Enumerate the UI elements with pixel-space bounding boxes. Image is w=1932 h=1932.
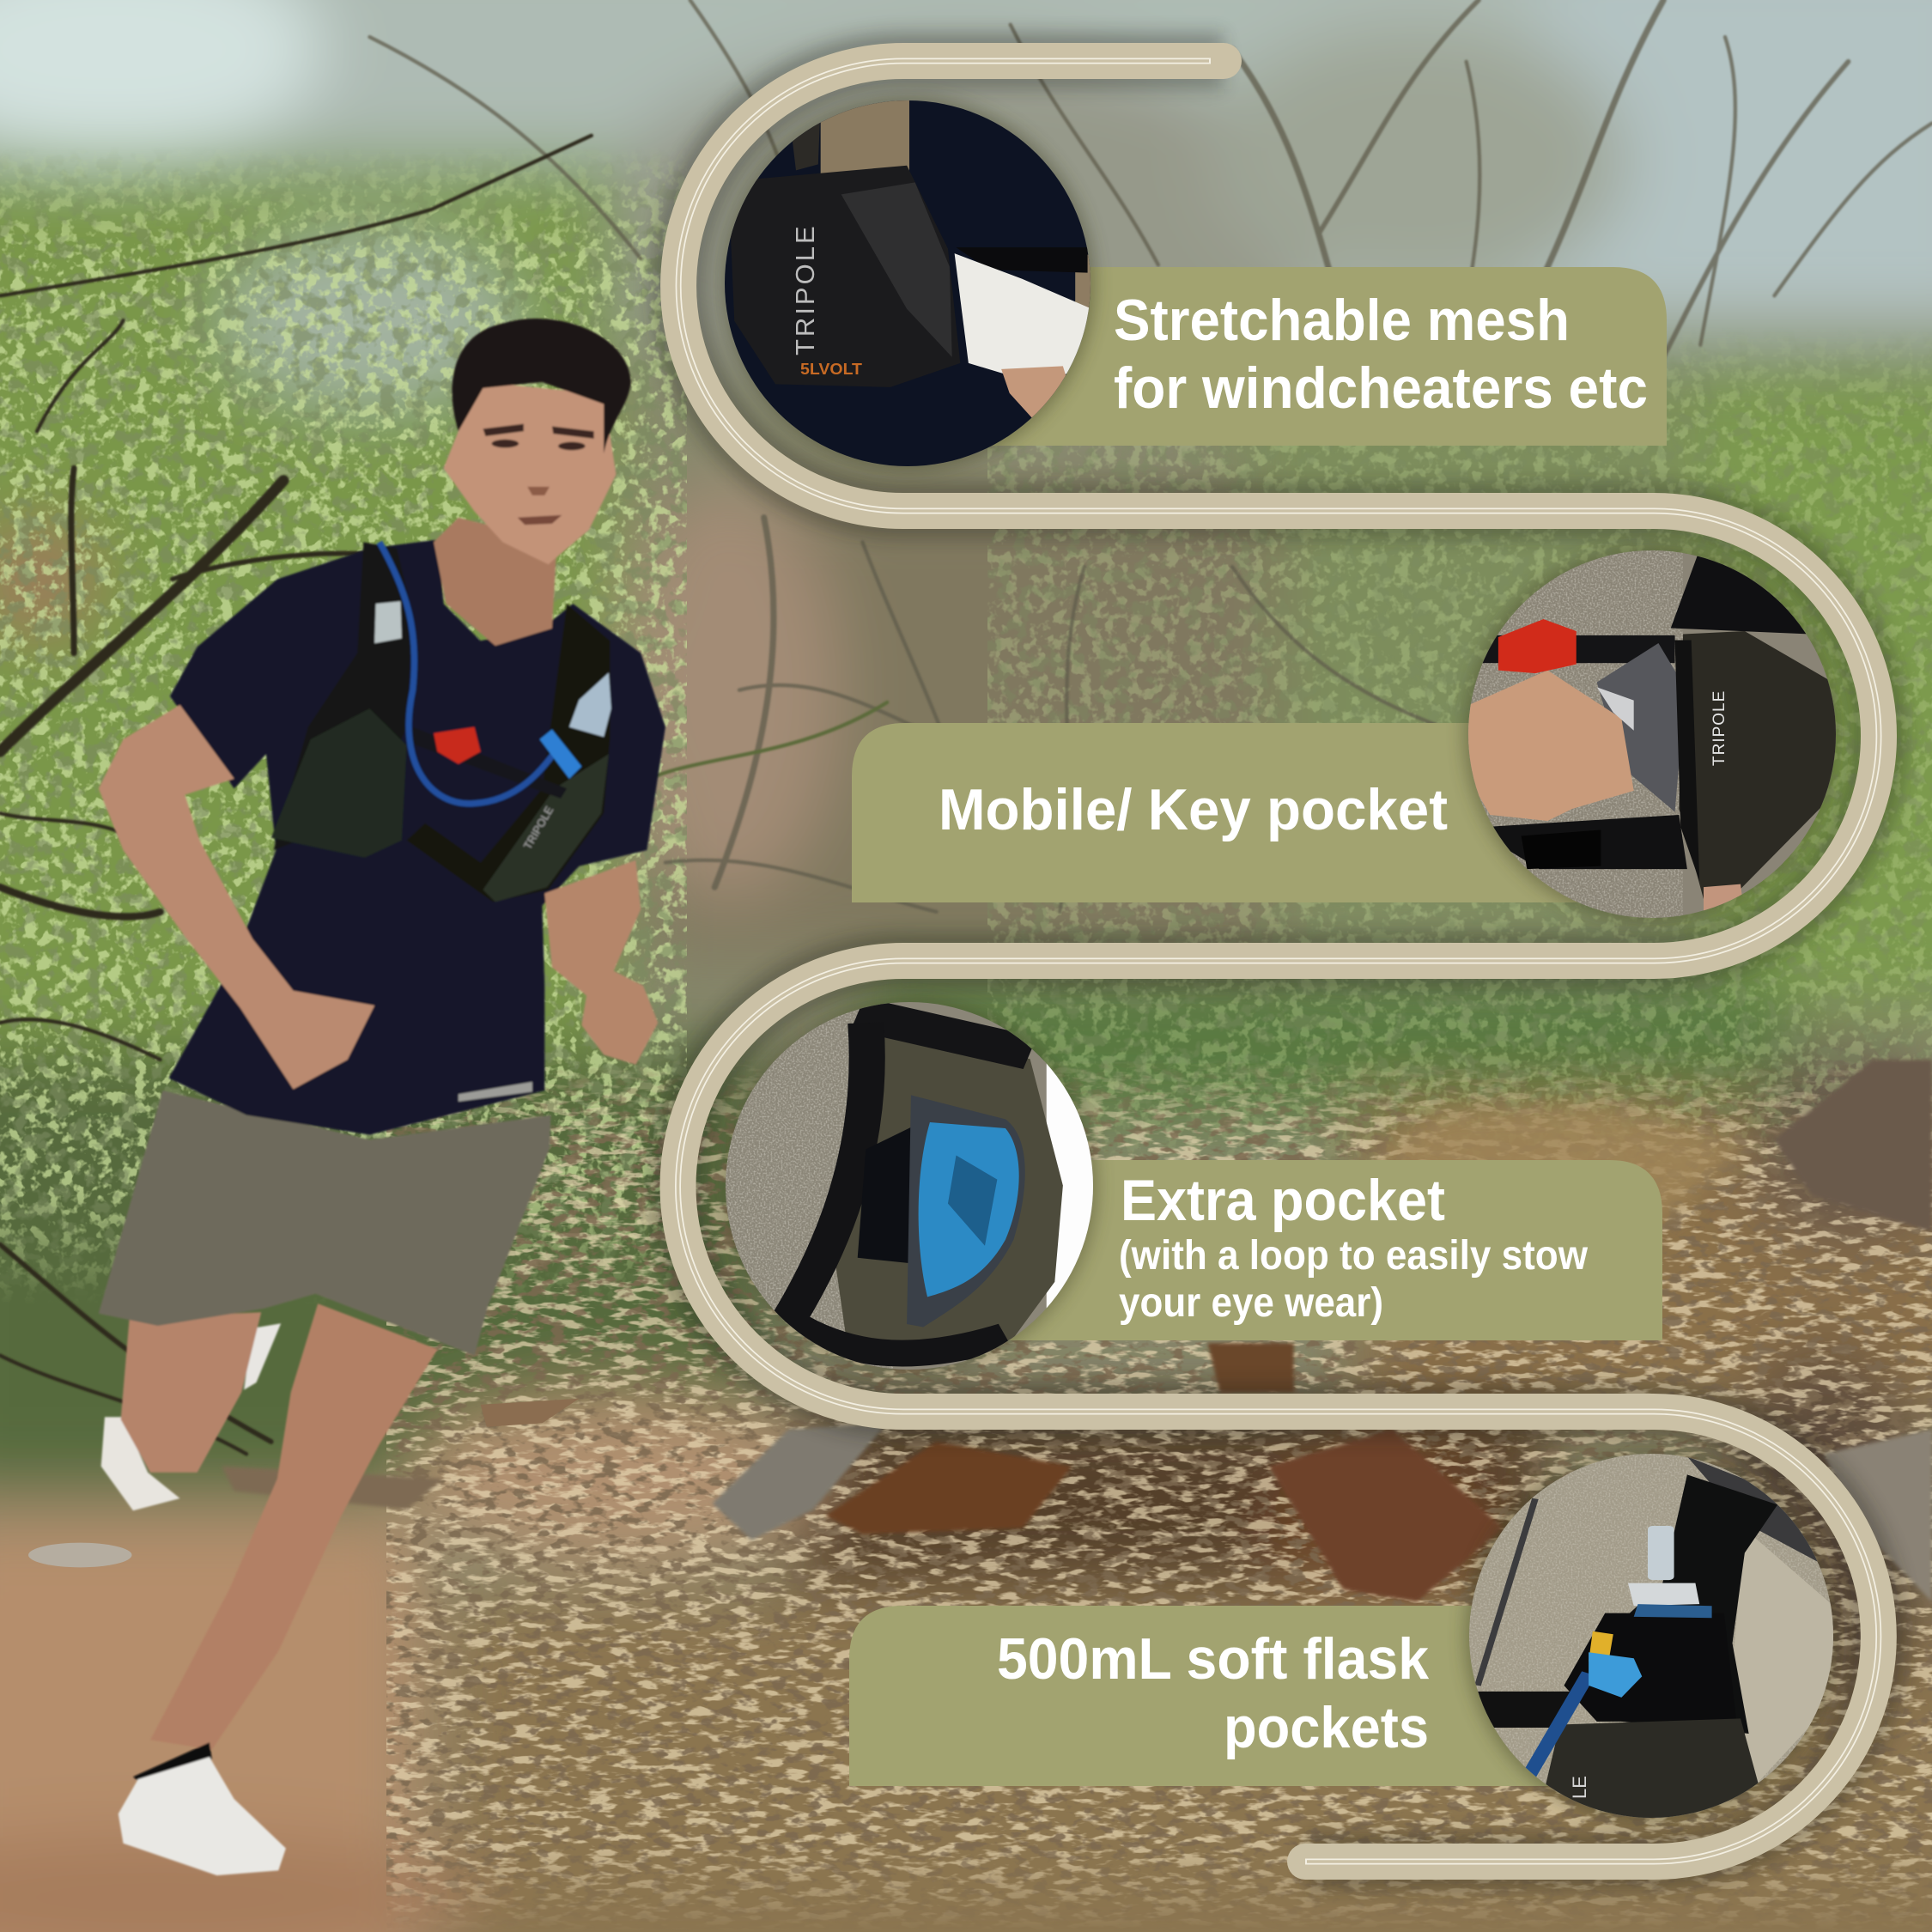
circular photo: phone pocket xyxy=(1460,541,1846,927)
label background xyxy=(945,267,1667,446)
pocket capacity mark: 5LVOLT xyxy=(800,361,862,378)
dark branches in the foreground tree xyxy=(0,136,887,1454)
shirt reflective strip xyxy=(459,1082,532,1102)
facial features xyxy=(483,424,594,525)
panel: mobile and key pocket xyxy=(852,541,1846,927)
ribbon pinstripe centre xyxy=(677,61,1879,1862)
circular photo: mesh pocket xyxy=(721,94,1099,472)
face xyxy=(444,382,617,564)
vest straps and pockets xyxy=(271,542,611,902)
label text: pockets xyxy=(1224,1695,1429,1760)
label text: (with a loop to easily stow xyxy=(1119,1233,1589,1279)
left arm and hand xyxy=(99,705,374,1090)
rock faces and trail stones xyxy=(28,1060,1932,1601)
circular photo: sunglasses loop xyxy=(721,996,1104,1378)
blue hydration tube xyxy=(380,542,557,804)
pocket logo fragment: LE xyxy=(1569,1776,1590,1799)
pocket logo: TRIPOLE xyxy=(790,223,820,355)
ribbon inner shadow xyxy=(677,61,1879,1862)
panel: stretchable mesh xyxy=(720,94,1667,472)
runner wearing hydration vest xyxy=(99,319,665,1875)
circular photo shadow xyxy=(721,998,1097,1374)
circular photo: flask pocket xyxy=(1460,1444,1846,1833)
bare tree branches xyxy=(369,0,1932,912)
label text: for windcheaters etc xyxy=(1114,355,1648,421)
circular photo shadow xyxy=(1464,546,1840,922)
label text: Mobile/ Key pocket xyxy=(939,777,1448,842)
clear bottle valves xyxy=(374,601,402,643)
label text: Stretchable mesh xyxy=(1114,288,1570,353)
hair xyxy=(453,319,631,453)
ribbon body xyxy=(677,61,1879,1862)
label text xyxy=(1119,1168,1589,1326)
panel: soft flask pockets xyxy=(849,1444,1846,1833)
label text xyxy=(997,1626,1429,1760)
label text xyxy=(1114,288,1648,421)
back leg and shoe xyxy=(101,1312,281,1510)
label background xyxy=(945,1160,1662,1340)
pocket logo: TRIPOLE xyxy=(1710,690,1728,766)
label background xyxy=(852,723,1631,902)
navy t-shirt xyxy=(169,540,665,1135)
winding beige ribbon connecting the features xyxy=(677,61,1879,1862)
neck xyxy=(434,518,557,646)
label text: 500mL soft flask xyxy=(997,1626,1429,1692)
right arm and hand xyxy=(544,860,658,1065)
label background xyxy=(849,1606,1631,1786)
red chest buckle xyxy=(434,727,481,764)
panel: extra pocket xyxy=(721,996,1662,1378)
shorts xyxy=(99,1091,550,1355)
circular photo shadow xyxy=(720,96,1095,471)
front leg and shoe xyxy=(118,1303,437,1875)
vest logo: TRIPOLE xyxy=(521,804,556,852)
blue bite valve xyxy=(540,730,581,779)
circular photo shadow xyxy=(1465,1449,1838,1822)
label text: your eye wear) xyxy=(1119,1280,1383,1326)
ribbon pinstripe xyxy=(677,61,1879,1862)
label text: Extra pocket xyxy=(1121,1168,1445,1233)
